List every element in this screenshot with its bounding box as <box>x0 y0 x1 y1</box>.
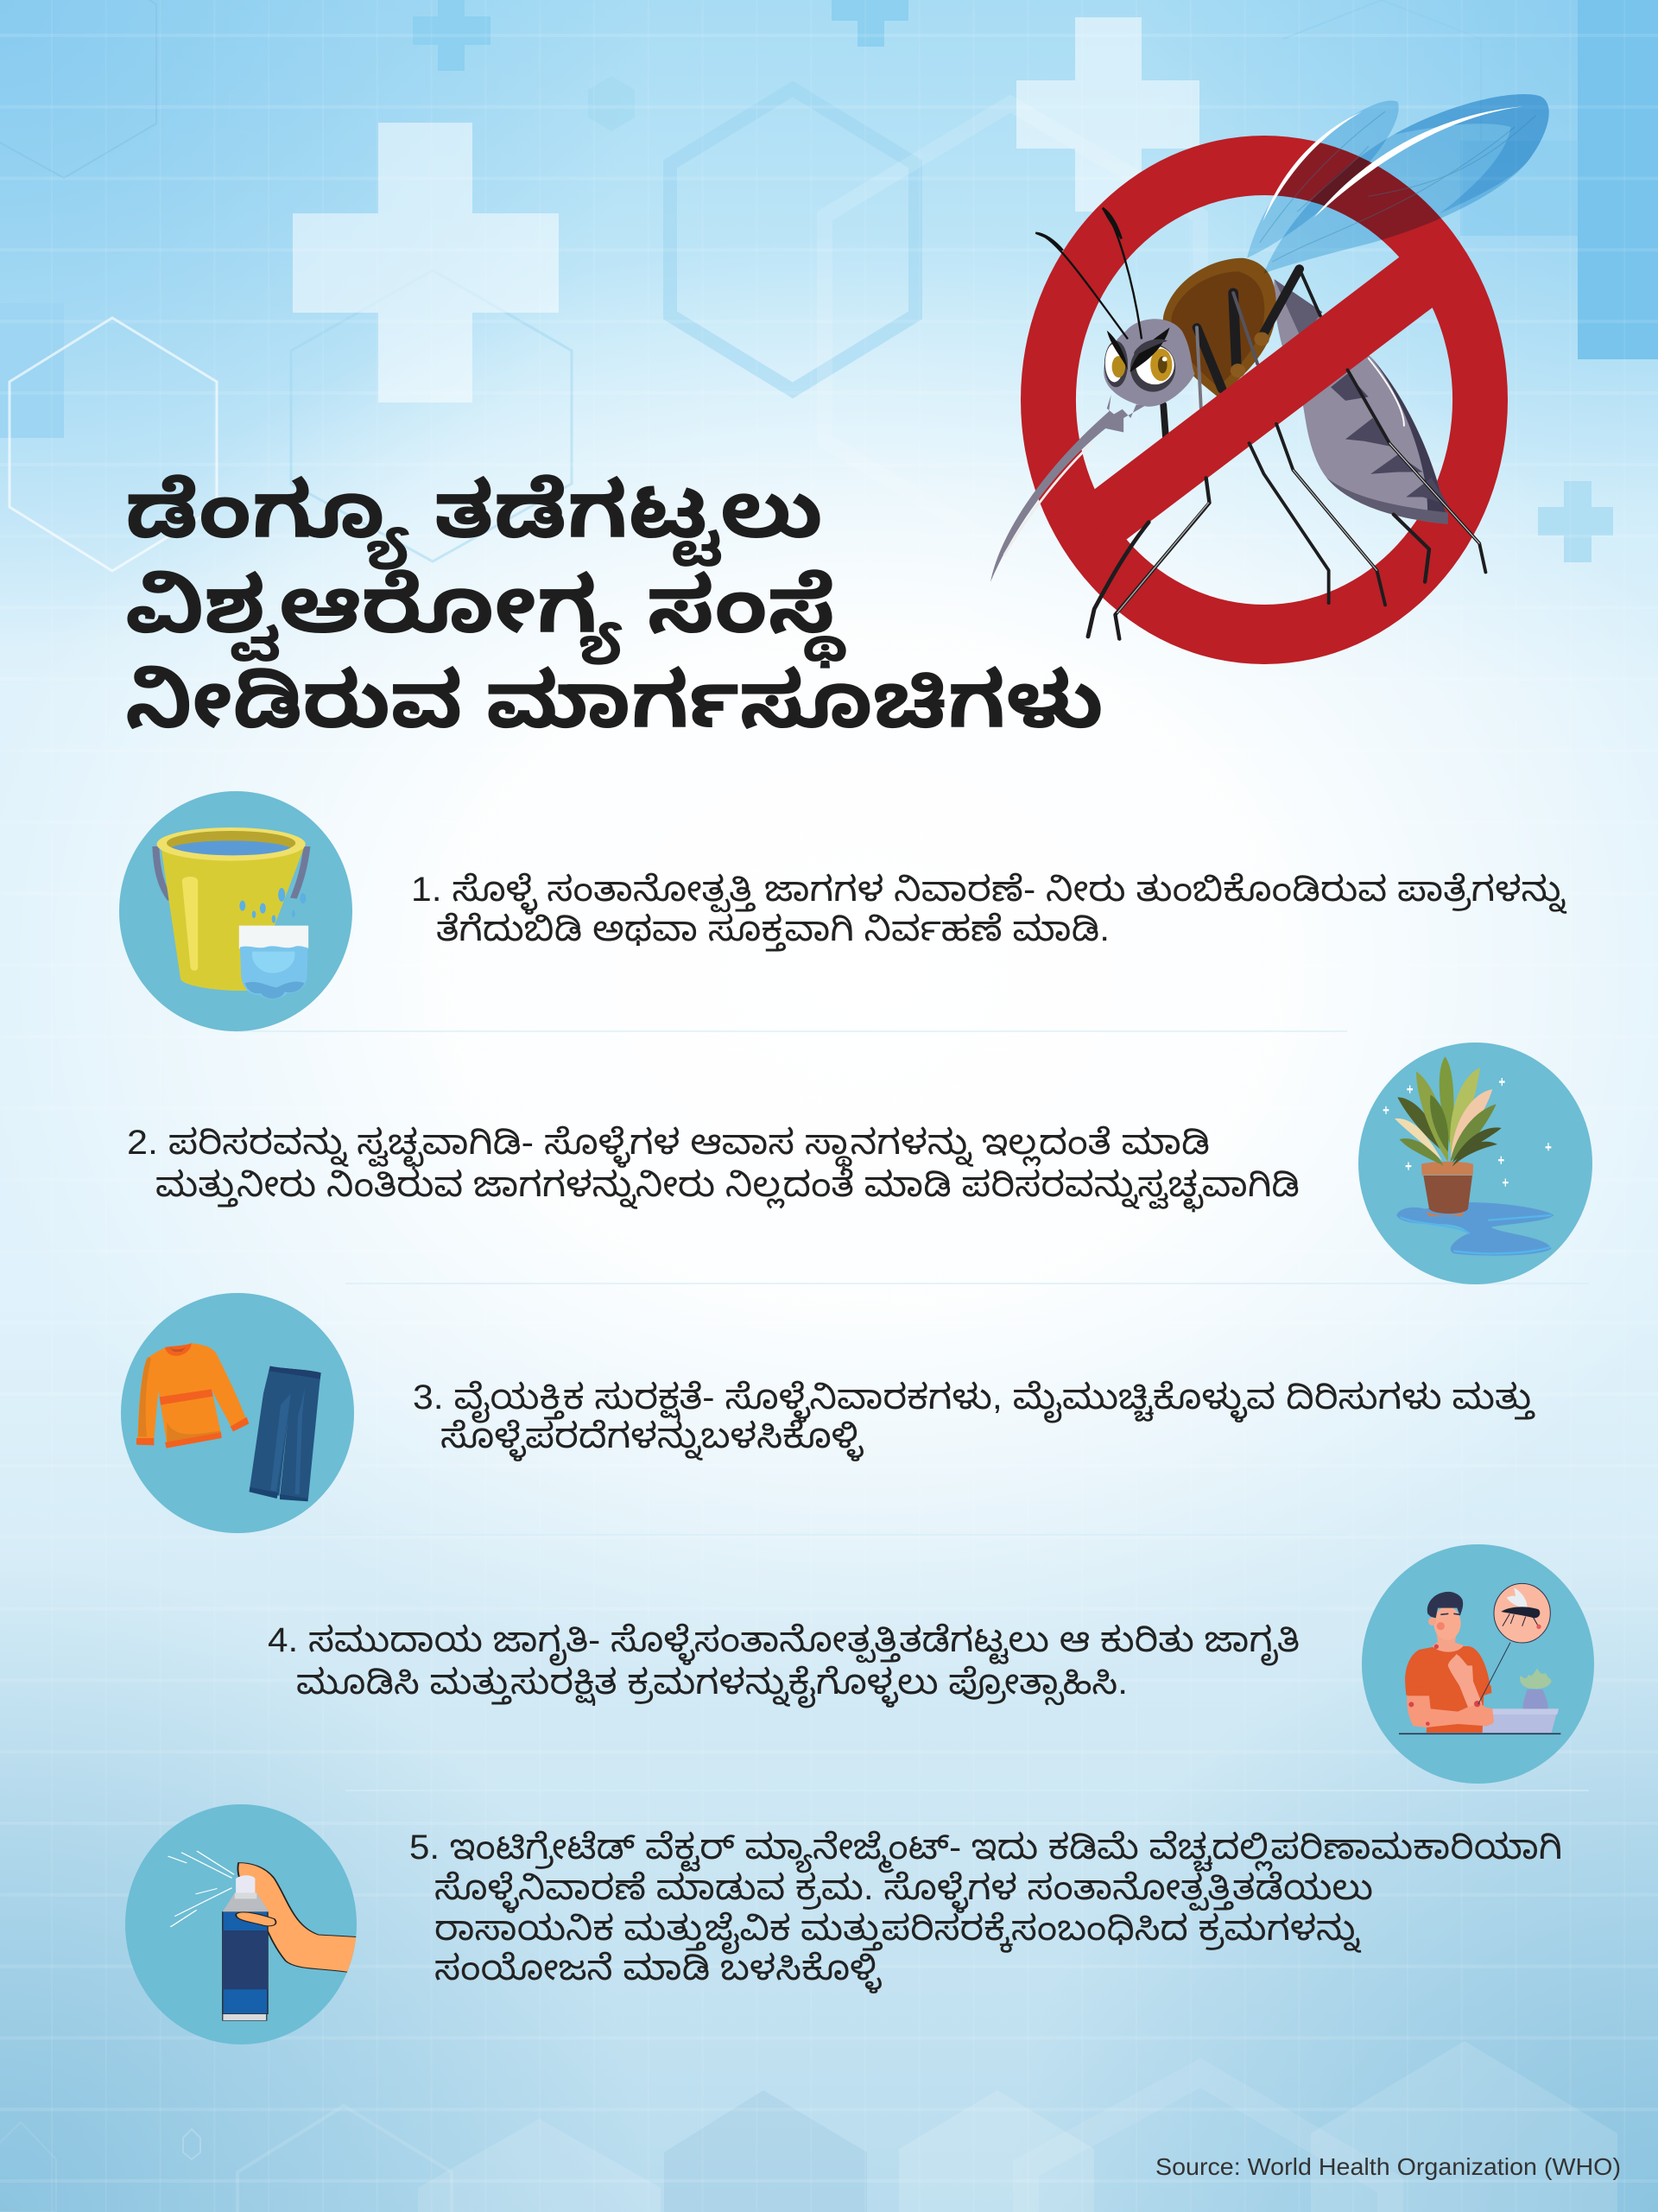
icon: protective clothing <box>121 1293 354 1533</box>
text: step 3: ಸೊಳ್ಳೆಪರದೆಗಳನ್ನುಬಳಸಿಕೊಳ್ಳಿ <box>440 1417 864 1461</box>
text: step 5: ಸೊಳ್ಳೆನಿವಾರಣೆ ಮಾಡುವ ಕ್ರಮ. ಸೊಳ್ಳೆಗಳ ಸಂತಾನೋತ್ಪತ್ತಿತಡೆಯಲು <box>434 1869 1373 1913</box>
text: step 2: 2. ಪರಿಸರವನ್ನು ಸ್ವಚ್ಛವಾಗಿಡಿ- ಸೊಳ್ಳೆಗಳ ಆವಾಸ ಸ್ಥಾನಗಳನ್ನು ಇಲ್ಲದಂತೆ ಮಾಡಿ <box>127 1124 1210 1170</box>
title <box>125 468 1104 745</box>
text: step 2 <box>127 1124 1300 1213</box>
text: step 1 <box>411 871 1567 952</box>
section dividers <box>233 1031 1589 1791</box>
text: step 3 <box>413 1379 1536 1461</box>
text: step 4 <box>268 1621 1300 1708</box>
text: step 1: ತೆಗೆದುಬಿಡಿ ಅಥವಾ ಸೂಕ್ತವಾಗಿ ನಿರ್ವಹಣೆ ಮಾಡಿ. <box>436 910 1110 952</box>
icon: person with mosquito bite <box>1362 1544 1594 1784</box>
text: step 4: 4. ಸಮುದಾಯ ಜಾಗೃತಿ- ಸೊಳ್ಳೆಸಂತಾನೋತ್ಪತ್ತಿತಡೆಗಟ್ಟಲು ಆ ಕುರಿತು ಜಾಗೃತಿ <box>268 1621 1300 1666</box>
text: step 3: 3. ವೈಯಕ್ತಿಕ ಸುರಕ್ಷತೆ- ಸೊಳ್ಳೆನಿವಾರಕಗಳು, ಮೈಮುಚ್ಚಿಕೊಳ್ಳುವ ದಿರಿಸುಗಳು ಮತ್ತು <box>413 1379 1536 1423</box>
text: step 2: ಮತ್ತುನೀರು ನಿಂತಿರುವ ಜಾಗಗಳನ್ನುನೀರು ನಿಲ್ಲದಂತೆ ಮಾಡಿ ಪರಿಸರವನ್ನುಸ್ವಚ್ಛವಾಗಿಡಿ <box>155 1166 1300 1213</box>
title: ನೀಡಿರುವ ಮಾರ್ಗಸೂಚಿಗಳು <box>125 658 1104 745</box>
text: step 5 <box>409 1829 1562 1993</box>
icon: hand holding repellent spray <box>125 1804 360 2044</box>
icon: bucket and water bottle <box>119 791 352 1031</box>
source credit: Source: World Health Organization (WHO) <box>1155 2153 1621 2180</box>
text: step 5: ರಾಸಾಯನಿಕ ಮತ್ತುಜೈವಿಕ ಮತ್ತುಪರಿಸರಕ್ಕೆಸಂಬಂಧಿಸಿದ ಕ್ರಮಗಳನ್ನು <box>434 1910 1362 1955</box>
icon: potted plant and stagnant water <box>1358 1043 1592 1284</box>
text: step 5: ಸಂಯೋಜನೆ ಮಾಡಿ ಬಳಸಿಕೊಳ್ಳಿ <box>434 1949 882 1993</box>
text: step 4: ಮೂಡಿಸಿ ಮತ್ತುಸುರಕ್ಷಿತ ಕ್ರಮಗಳನ್ನುಕೈಗೊಳ್ಳಲು ಪ್ರೋತ್ಸಾಹಿಸಿ. <box>296 1664 1128 1708</box>
title: ಡೆಂಗ್ಯೂ ತಡೆಗಟ್ಟಲು <box>125 468 823 570</box>
text: step 1: 1. ಸೊಳ್ಳೆ ಸಂತಾನೋತ್ಪತ್ತಿ ಜಾಗಗಳ ನಿವಾರಣೆ- ನೀರು ತುಂಬಿಕೊಂಡಿರುವ ಪಾತ್ರೆಗಳನ್ನು <box>411 871 1567 915</box>
title: ವಿಶ್ವಆರೋಗ್ಯ ಸಂಸ್ಥೆ <box>125 563 847 669</box>
illustration: mosquito prohibition sign <box>990 94 1549 664</box>
text: step 5: 5. ಇಂಟಿಗ್ರೇಟೆಡ್ ವೆಕ್ಟರ್ ಮ್ಯಾನೇಜ್ಮೆಂಟ್- ಇದು ಕಡಿಮೆ ವೆಚ್ಚದಲ್ಲಿಪರಿಣಾಮಕಾರಿಯಾಗಿ <box>409 1829 1562 1873</box>
